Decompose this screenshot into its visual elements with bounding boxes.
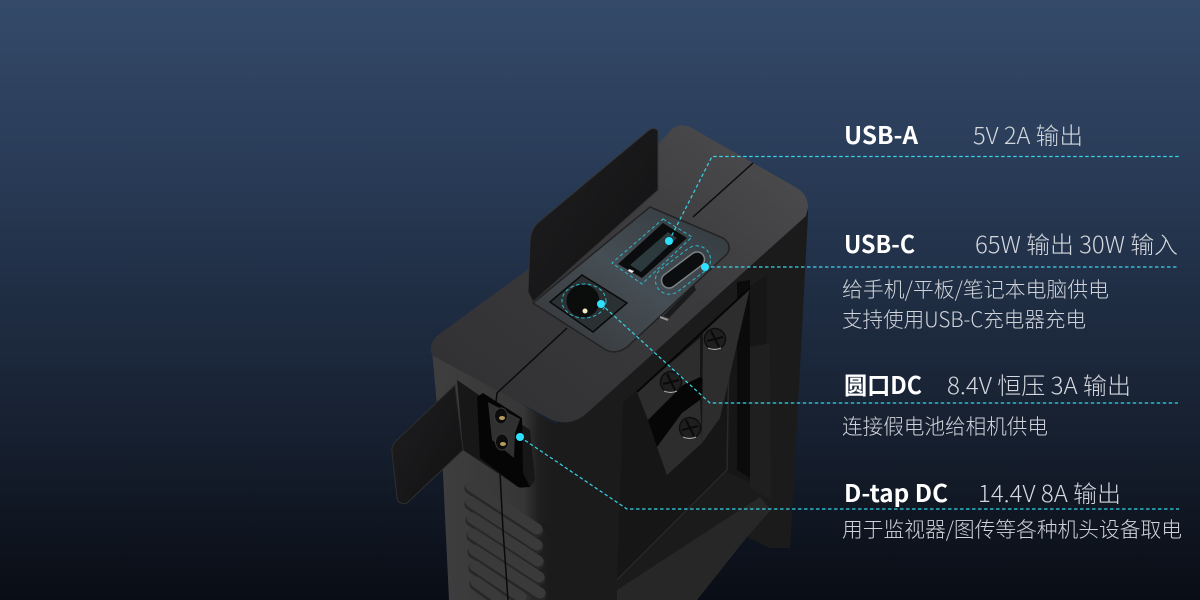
label: round DC: 8.4V 恒压 3A 输出 (947, 367, 1131, 401)
label: round DC (844, 366, 1131, 401)
USB-C port (650, 240, 716, 300)
label: USB-A: 5V 2A 输出 (973, 117, 1083, 151)
battery device (392, 125, 808, 600)
connector line: D-tap (516, 433, 1179, 509)
label: USB-A (844, 116, 1083, 151)
label: D-tap DC: D-tap DC (844, 474, 948, 509)
description: USB-C: 支持使用USB-C充电器充电 (842, 304, 1086, 334)
description: round DC: 连接假电池给相机供电 (842, 411, 1048, 441)
USB-A port (612, 219, 692, 284)
description: USB-C (842, 274, 1109, 334)
mounting recess (617, 275, 771, 600)
label: USB-A: USB-A (844, 116, 919, 151)
connector line: round DC (597, 300, 1178, 403)
description: USB-C: 给手机/平板/笔记本电脑供电 (842, 274, 1109, 304)
lower left seam (500, 473, 508, 600)
side rail (540, 521, 565, 600)
top face of battery (431, 125, 808, 422)
label: USB-C: 65W 输出 30W 输入 (975, 226, 1178, 260)
open rubber flap, side (392, 385, 463, 503)
latch notch (660, 285, 696, 320)
connector line: USB-C (701, 263, 1177, 271)
round DC port (550, 275, 627, 332)
port recess panel (533, 207, 729, 352)
right face of battery (555, 205, 808, 600)
D-tap port (457, 380, 535, 488)
screws (660, 328, 726, 438)
label: USB-C: USB-C (844, 225, 915, 260)
open rubber flap, top (528, 128, 658, 302)
label: D-tap DC: 14.4V 8A 输出 (978, 475, 1121, 509)
connector line: USB-A (665, 156, 1180, 245)
left face of battery (432, 350, 555, 600)
label: D-tap DC (844, 474, 1121, 509)
description: D-tap DC: 用于监视器/图传等各种机头设备取电 (842, 514, 1182, 544)
label: round DC: 圆口DC (844, 366, 922, 401)
label: USB-C (844, 225, 1178, 260)
top seams (496, 163, 753, 402)
grip ribs (471, 486, 540, 598)
V-mount plates (637, 288, 750, 475)
